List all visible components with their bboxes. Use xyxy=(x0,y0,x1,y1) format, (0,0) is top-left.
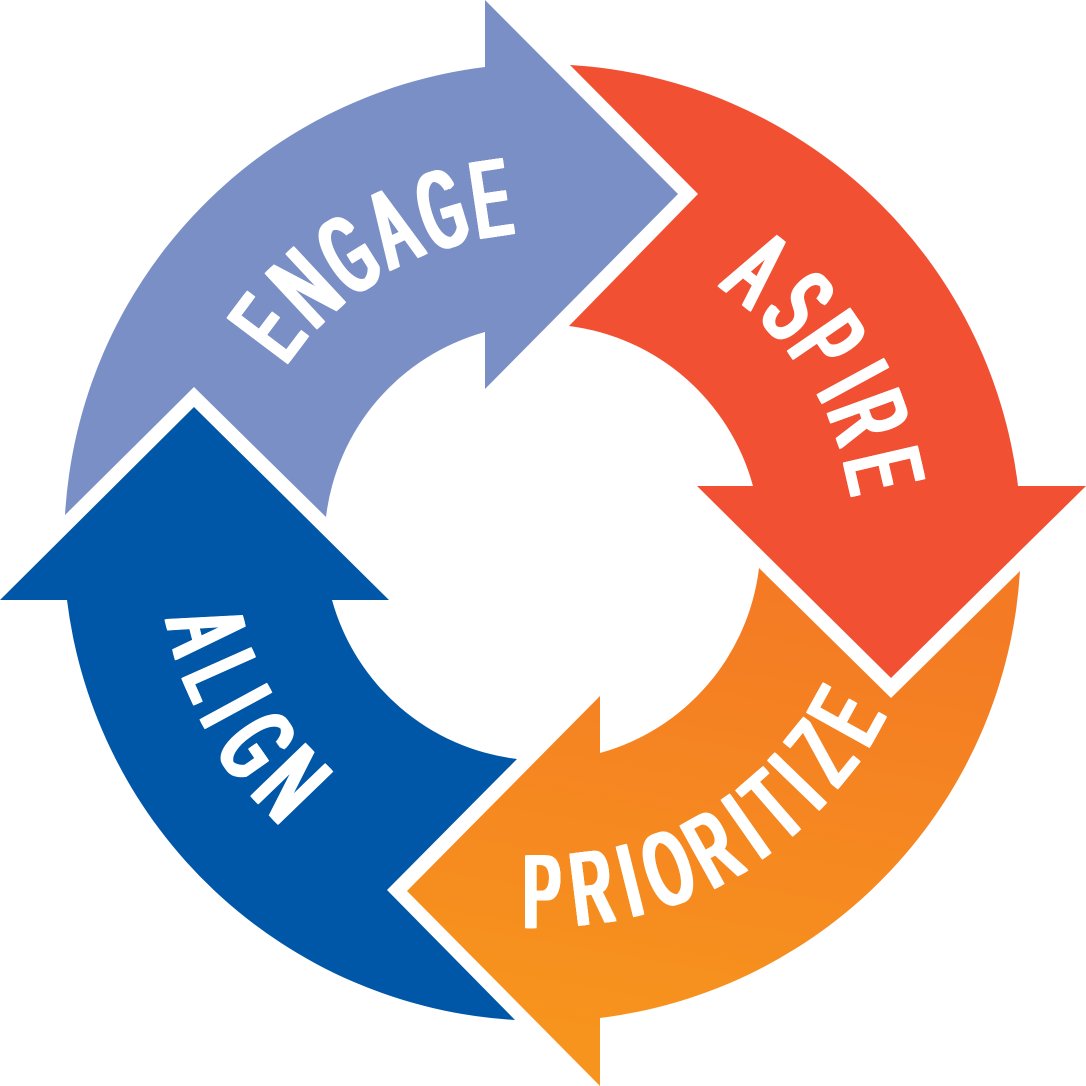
label: align: N xyxy=(232,726,350,842)
label: prioritize: P xyxy=(524,834,560,948)
label: prioritize xyxy=(524,671,905,948)
label: align: A xyxy=(143,597,270,663)
label: aspire: P xyxy=(767,293,888,392)
label: engage: N xyxy=(248,228,363,347)
label: align: I xyxy=(178,670,293,742)
label: engage: G xyxy=(404,145,480,274)
label: prioritize: E xyxy=(787,671,905,759)
label: prioritize: R xyxy=(565,828,619,946)
label: align xyxy=(143,597,350,842)
label: aspire: R xyxy=(804,377,933,456)
label: engage: A xyxy=(351,165,435,291)
label: engage xyxy=(208,135,518,379)
label: engage: E xyxy=(208,276,327,379)
label: prioritize: R xyxy=(668,788,758,908)
label: engage: E xyxy=(464,135,518,262)
label: prioritize: O xyxy=(629,807,707,929)
label: aspire: I xyxy=(795,345,910,417)
label: aspire: S xyxy=(740,251,855,360)
arrow: align xyxy=(0,407,517,1020)
label: prioritize: T xyxy=(723,751,823,859)
label: aspire: A xyxy=(705,209,809,328)
arrow: engage xyxy=(65,0,678,517)
label: aspire: E xyxy=(820,438,947,501)
label: align: L xyxy=(160,636,283,713)
label: prioritize: Z xyxy=(766,703,876,801)
label: aspire xyxy=(705,209,947,501)
label: prioritize: I xyxy=(750,736,844,826)
arrow: prioritize xyxy=(407,568,1020,1086)
label: engage: G xyxy=(298,192,399,318)
label: prioritize: I xyxy=(609,822,651,938)
arrow: aspire xyxy=(569,65,1086,678)
label: prioritize: I xyxy=(707,775,785,877)
label: align: G xyxy=(194,692,319,797)
